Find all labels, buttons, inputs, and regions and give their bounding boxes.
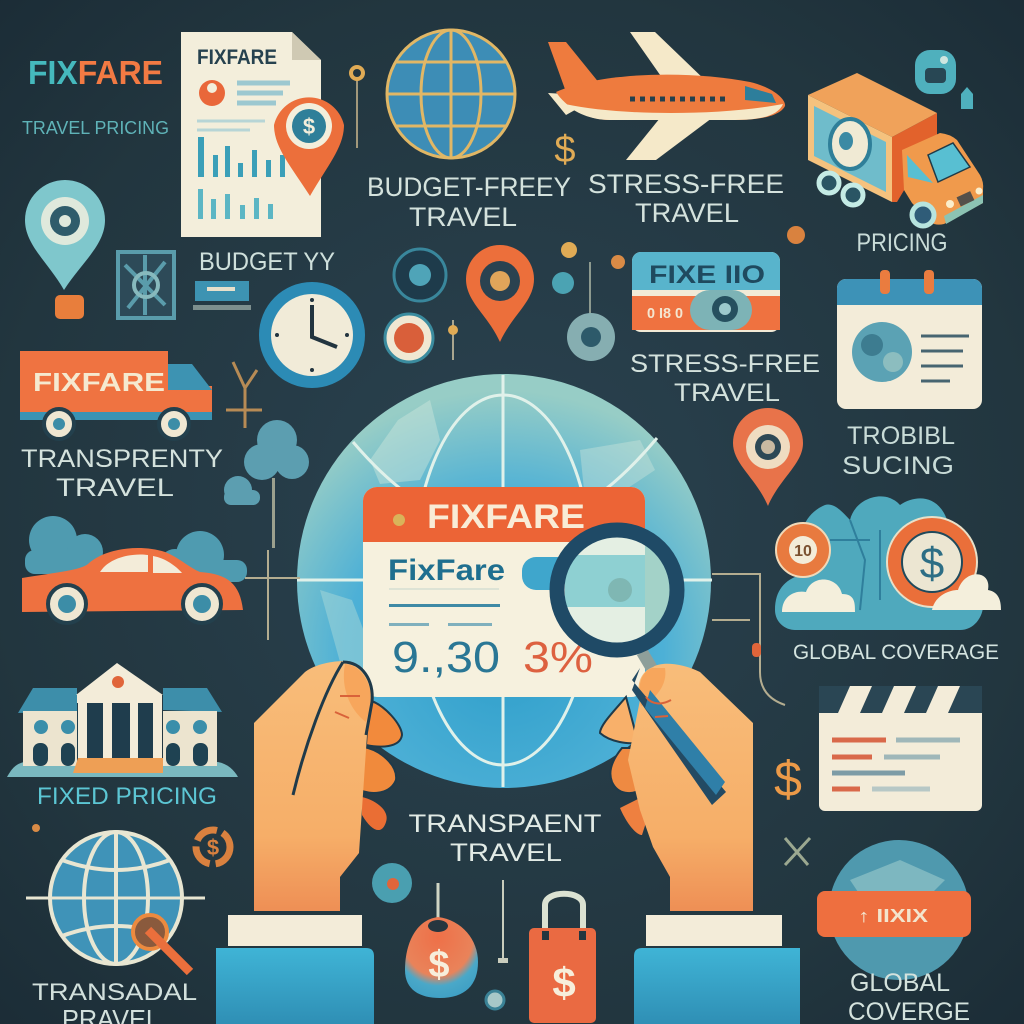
icon: small round badges centre xyxy=(385,249,458,362)
icon: small orange dot xyxy=(787,226,805,244)
icon: large centre globe xyxy=(297,374,712,788)
panel: budget document: FIXFARE xyxy=(197,46,277,69)
icon: dollar orange: $ xyxy=(774,751,802,807)
icon: square map xyxy=(118,252,174,318)
label: fixed pricing: FIXED PRICING xyxy=(37,783,217,810)
icon: right cuff and sleeve xyxy=(634,915,800,1024)
panel: fixfare ticket: 0 I8 0 xyxy=(647,305,683,322)
panel: budget document xyxy=(181,32,321,237)
label: budget-free travel: BUDGET-FREEY xyxy=(367,172,571,202)
panel: central fixfare card: FIXFARE xyxy=(427,498,585,536)
panel: fixfare ticket xyxy=(632,252,780,332)
connector lines xyxy=(245,550,785,705)
icon: price tag teal-orange: $ xyxy=(428,944,450,986)
label: budget-free travel xyxy=(367,172,571,232)
label: stress-free travel mid: TRAVEL xyxy=(674,379,780,407)
icon: globe badge bottom right xyxy=(817,840,971,980)
label: pricing top right: PRICING xyxy=(856,229,948,257)
label: budget-free travel: TRAVEL xyxy=(409,202,517,232)
icon: right cloud scene: 10 xyxy=(794,543,812,560)
icon: fixfare van: FIXFARE xyxy=(33,367,165,397)
icon: bank building xyxy=(7,663,238,777)
label: stress-free travel top: STRESS-FREE xyxy=(588,169,784,199)
icon: left hand xyxy=(254,661,402,911)
icon: small dots and dial xyxy=(552,242,625,361)
label: trobibl sucing xyxy=(842,422,955,480)
label: stress-free travel mid: STRESS-FREE xyxy=(630,350,820,378)
icon: teal trees xyxy=(224,420,309,548)
panel: central fixfare card: 3% xyxy=(523,633,593,682)
logo: FixFare Travel Pricing: FIXFARE xyxy=(28,54,163,91)
icon: left cuff and sleeve xyxy=(216,915,374,1024)
label: transparent travel: TRAVEL xyxy=(450,839,562,867)
logo: FixFare Travel Pricing: TRAVEL PRICING xyxy=(22,118,169,138)
icon: small ticket xyxy=(193,281,251,310)
icon: small dollar and seal: $ xyxy=(207,835,219,860)
icon: magnifying glass xyxy=(557,530,677,682)
label: transprenty travel: TRANSPRENTY xyxy=(21,445,223,473)
icon: right cloud scene xyxy=(775,496,1001,630)
icon: right hand xyxy=(600,664,753,911)
icon: shopping lock bag: $ xyxy=(552,959,576,1006)
label: transparent travel xyxy=(408,810,602,867)
panel: central fixfare card: FixFare xyxy=(388,554,505,587)
icon: face badge top right xyxy=(915,50,973,109)
panel: central fixfare card: 9.,30 xyxy=(392,633,500,682)
logo: FixFare Travel Pricing xyxy=(22,54,169,138)
label: transparent travel: TRANSPAENT xyxy=(408,810,602,838)
icon: orange pin right xyxy=(733,408,803,506)
icon: right cloud scene: $ xyxy=(920,539,944,588)
label: stress-free travel mid xyxy=(630,350,820,407)
label: stress-free travel top: TRAVEL xyxy=(635,198,739,228)
label: transadal travel xyxy=(32,979,197,1024)
panel: striped ticket xyxy=(819,686,982,811)
label: global coverage: GLOBAL COVERAGE xyxy=(793,641,999,664)
label: trobibl sucing: SUCING xyxy=(842,452,954,480)
label: global coverge xyxy=(848,969,970,1024)
panel: fixfare ticket: FIXE IIO xyxy=(649,261,765,289)
panel: calendar xyxy=(837,270,982,409)
label: transprenty travel: TRAVEL xyxy=(56,474,174,502)
icon: large teal location pin xyxy=(25,180,105,319)
icon: airplane xyxy=(548,32,785,160)
icon: orange map pin centre xyxy=(466,245,534,342)
icon: orange map pin with dollar xyxy=(274,97,344,196)
icon: thin pole and dot xyxy=(486,880,508,1009)
icon: small teal badge xyxy=(372,863,412,903)
label: global coverge: GLOBAL xyxy=(850,969,950,997)
label: transprenty travel xyxy=(21,445,223,502)
icon: clock xyxy=(259,282,365,388)
label: transadal travel: TRANSADAL xyxy=(32,979,197,1006)
icon: dollar sign: $ xyxy=(554,129,576,171)
icon: orange connector bead xyxy=(752,643,761,657)
icon: orange arrow cursor xyxy=(133,915,190,972)
icon: orange car xyxy=(22,516,247,623)
icon: fixfare van xyxy=(20,351,212,439)
icon: globe badge bottom right: ↑ IIXIX xyxy=(858,906,928,926)
icon: wireframe globe xyxy=(387,30,515,158)
icon: shopping lock bag xyxy=(529,894,596,1023)
icon: price tag teal-orange xyxy=(405,883,478,998)
label: trobibl sucing: TROBIBL xyxy=(847,422,955,450)
icon: small pin connector xyxy=(349,65,365,148)
panel: central fixfare card xyxy=(363,487,645,697)
icon: wire globe bottom left xyxy=(26,832,205,964)
icon: orange map pin with dollar: $ xyxy=(303,114,315,139)
small antenna icon xyxy=(226,362,262,428)
icon: crossed tools xyxy=(785,838,810,865)
label: budget: BUDGET YY xyxy=(199,248,335,276)
icon: small dollar and seal xyxy=(32,824,230,864)
label: stress-free travel top xyxy=(588,169,784,228)
icon: delivery truck xyxy=(808,73,983,226)
